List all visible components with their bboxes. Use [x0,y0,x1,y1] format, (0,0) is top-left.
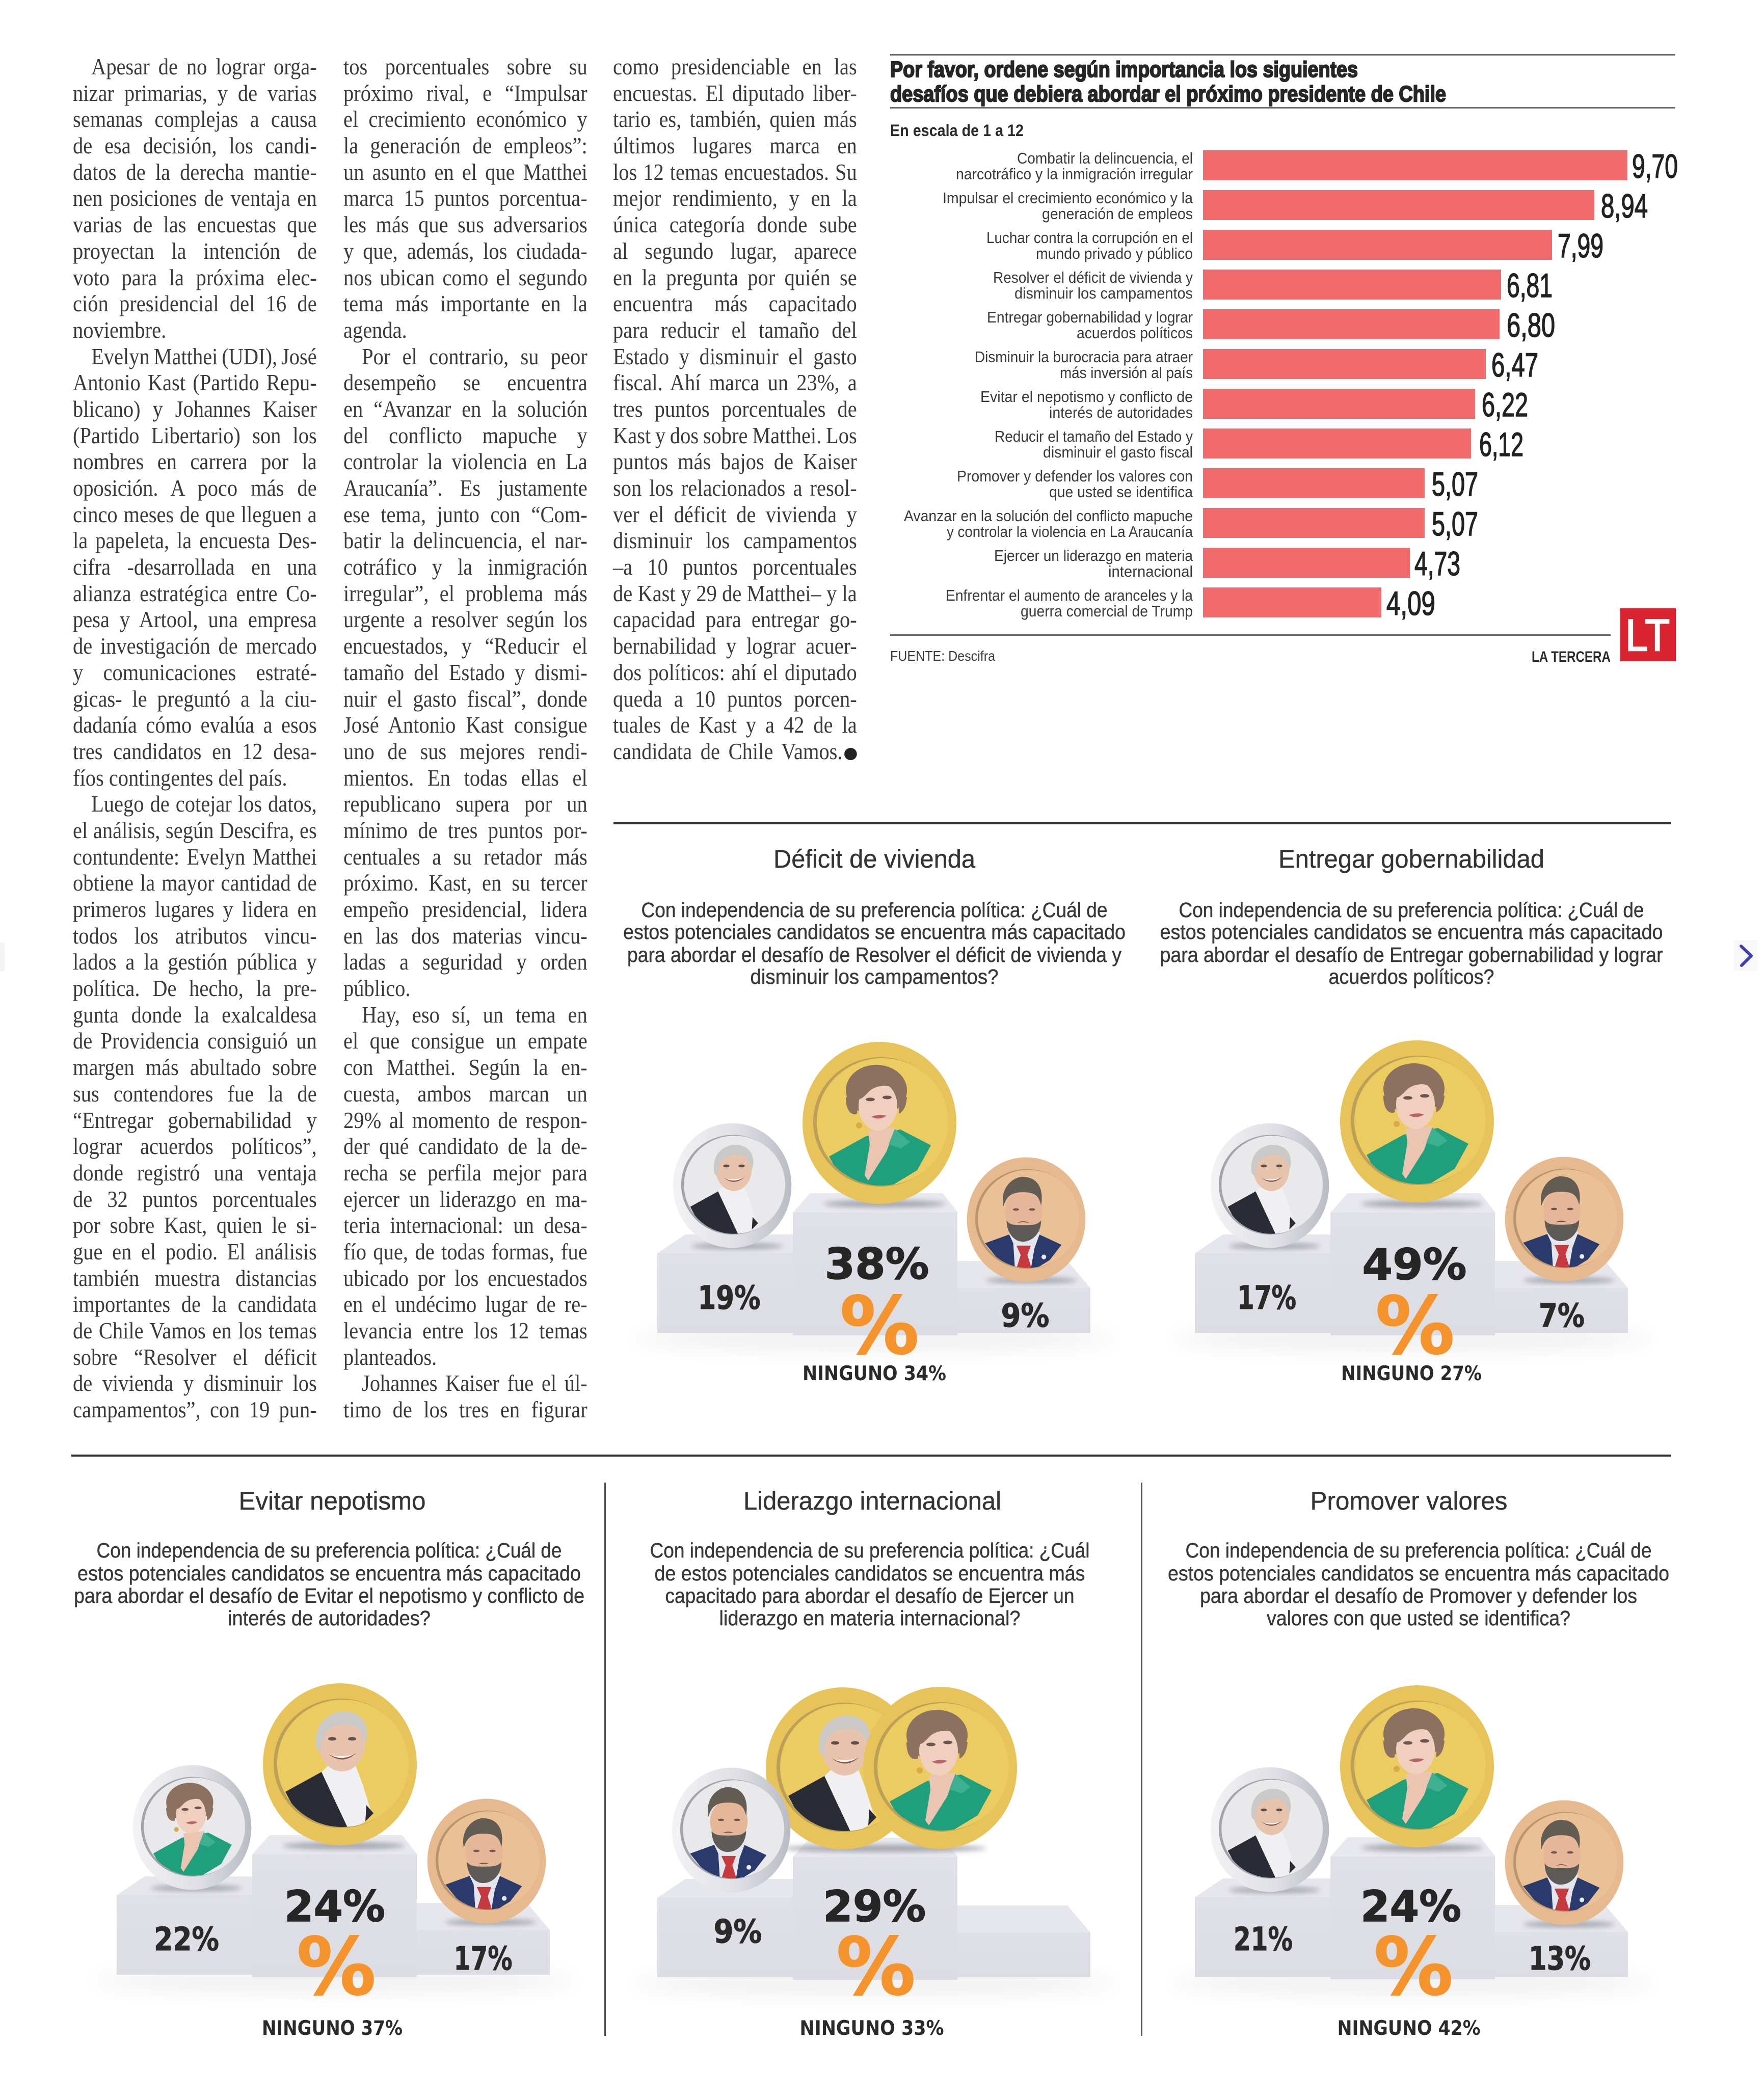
body text column 2: agenda. [343,317,407,343]
body text column 2: 29% al momento de respon- [343,1107,587,1133]
coin: Matthei gold [803,1042,956,1204]
bar values: 5,07 [1432,465,1478,503]
body text column 3: dos políticos: ahí el diputado [613,659,857,685]
bars [1203,150,1627,617]
body text column 1: obtiene la mayor cantidad de [73,870,317,896]
question [1168,1539,1669,1630]
question: estos potenciales candidatos se encuentra más capacitado [1168,1562,1669,1585]
body text column 2: tema más importante en la [343,290,587,316]
second place value: 17% [1237,1279,1296,1316]
bar labels: más inversión al país [1060,364,1193,382]
logo: LT: LT [1625,610,1670,660]
body text column 2: tos porcentuales sobre su [343,53,587,79]
bar labels: Luchar contra la corrupción en el [986,229,1193,247]
bar labels: Impulsar el crecimiento económico y la [943,189,1193,207]
panel title: Liderazgo internacional [743,1487,1001,1515]
body text column 1: Apesar de no lograr orga- [91,53,317,79]
body text column 2: teria internacional: un desa- [343,1212,587,1238]
body text column 3: en la pregunta por quién se [613,264,857,290]
body text column 2 [343,53,587,1422]
first place value: 24% [1360,1881,1461,1931]
body text column 1: por sobre Kast, quien le si- [73,1212,317,1238]
body text column 1: Luego de cotejar los datos, [91,791,317,817]
coin: Matthei gold [1340,1040,1494,1202]
panel title: Evitar nepotismo [238,1487,426,1515]
body text column 2: uno de sus mejores rendi- [343,738,587,764]
question: para abordar el desafío de Promover y defender los [1200,1584,1637,1607]
body text column 2: encuestados, y “Reducir el [343,633,587,659]
body text column 2: controlar la violencia en La [343,448,587,474]
second place value: 22% [154,1921,219,1958]
body text column 3: –a 10 puntos porcentuales [613,554,857,580]
body text column 1: de investigación de mercado [73,633,317,659]
body text column 3: tario es, también, quien más [613,106,857,132]
bar values: 4,73 [1414,545,1460,582]
body text column 2: republicano supera por un [343,791,587,817]
body text column 1: de Chile Vamos en los temas [73,1318,317,1343]
body text column 1: Evelyn Matthei (UDI), José [91,343,317,369]
coin: Matthei gold [863,1687,1017,1849]
body text column 2: en las dos materias vincu- [343,923,587,949]
third place value: 7% [1539,1297,1585,1334]
bar labels: guerra comercial de Trump [1021,602,1193,620]
question: estos potenciales candidatos se encuentra más capacitado [623,920,1126,944]
coin: Kaiser bronze [427,1799,546,1923]
chart: desafíos ranking [890,54,1678,665]
body text column 1: “Entregar gobernabilidad y [73,1107,317,1133]
none value: NINGUNO 34% [803,1362,946,1385]
bar labels: Reducir el tamaño del Estado y [995,427,1193,445]
question: estos potenciales candidatos se encuentra más capacitado [77,1562,581,1585]
body text column 2: desempeño se encuentra [343,369,587,395]
body text column 1: datos de la derecha mantie- [73,159,317,185]
question [74,1539,584,1630]
bar labels: Entregar gobernabilidad y lograr [987,308,1193,326]
body text column 1: voto para la próxima elec- [73,264,317,290]
coin: Kaiser silver [672,1768,790,1892]
bar values: 5,07 [1432,505,1478,543]
body text column 2: der qué candidato de la de- [343,1133,587,1159]
body text column 1: gunta donde la exalcaldesa [73,1002,317,1028]
chart title: desafíos que debiera abordar el próximo presidente de Chile [890,82,1446,106]
bar labels: Enfrentar el aumento de aranceles y la [946,586,1193,604]
coin: Kaiser bronze [967,1158,1085,1282]
panel title: Promover valores [1311,1487,1507,1515]
body text column 1: de esa decisión, los candi- [73,132,317,158]
body text column 2: mínimo de tres puntos por- [343,817,587,843]
none value: NINGUNO 33% [800,2017,944,2040]
body text column 2: ese tema, junto con “Com- [343,501,587,527]
body text column 3: para reducir el tamaño del [613,317,857,343]
body text column 3: de Kast y 29 de Matthei– y la [613,580,857,606]
second place value: 19% [698,1279,760,1316]
body text column 3: Estado y disminuir el gasto [613,343,857,369]
third place value: 17% [453,1940,513,1977]
body text column 3: capacidad para entregar go- [613,606,857,632]
body text column 1: proyectan la intención de [73,238,317,264]
body text column 2: mientos. En todas ellas el [343,765,587,791]
body text column 3: son los relacionados a resol- [613,475,857,501]
body text column 1: política. De hecho, la pre- [73,975,317,1001]
bar labels: Ejercer un liderazgo en materia [994,547,1193,564]
bar labels: mundo privado y público [1036,245,1193,262]
body text column 1: la papeleta, la encuesta Des- [73,527,317,553]
podium [635,1193,1114,1351]
orange percent icon: % [840,1280,919,1372]
body text column 1: noviembre. [73,317,166,343]
body text column 2: ubicado por los encuestados [343,1265,587,1291]
body text column 1: margen más abultado sobre [73,1054,317,1080]
body text column 2: urgente a resolver según los [343,606,587,632]
body text column 1: pesa y Artool, una empresa [73,606,317,632]
question [650,1539,1089,1630]
first place value: 24% [284,1881,385,1931]
body text column 1: gicas- le preguntó a la ciu- [73,686,317,711]
bar labels: Avanzar en la solución del conflicto mapuche [904,507,1193,525]
bar values: 4,09 [1386,584,1435,622]
body text column 3: encuentra más capacitado [613,290,857,316]
body text column 1: nombres en carrera por la [73,448,317,474]
bar labels: acuerdos políticos [1077,324,1193,342]
question: Con independencia de su preferencia política: ¿Cuál de [1185,1539,1652,1562]
panel: evitar nepotismo [74,1487,584,2040]
question: interés de autoridades? [228,1606,431,1630]
body text column 3: fiscal. Ahí marca un 23%, a [613,369,857,395]
bar labels: disminuir los campamentos [1014,284,1193,302]
nav arrow right [1733,940,1757,971]
panel: entregar gobernabilidad [1160,845,1663,1385]
body text column 2: próximo rival, e “Impulsar [343,80,587,106]
coin: Matthei silver [133,1765,251,1890]
body text column 3: al segundo lugar, aparece [613,238,857,264]
body text column 2: un asunto en el que Matthei [343,159,587,185]
bar values: 6,22 [1482,386,1528,423]
body text column 1: fíos contingentes del país. [73,765,287,791]
coin: Matthei gold [1340,1685,1494,1847]
question: de estos potenciales candidatos se encuentra más [654,1562,1085,1585]
panel: liderazgo internacional [635,1487,1114,2040]
body text column 3: ver el déficit de vivienda y [613,501,857,527]
body text column 2: empeño presidencial, lidera [343,896,587,922]
body text column 1: donde registró una ventaja [73,1160,317,1186]
body text column 1: nizar primarias, y de varias [73,80,317,106]
La Tercera credit: LA TERCERA [1532,649,1611,665]
body text column 2: recha se perfila mejor para [343,1160,587,1186]
body text column 1: también muestra distancias [73,1265,317,1291]
coin: Kaiser bronze [1505,1800,1623,1925]
second place value: 21% [1234,1921,1293,1958]
body text column 1: sus contendores fue la de [73,1081,317,1107]
body text column 3: disminuir los campamentos [613,527,857,553]
question: para abordar el desafío de Resolver el déficit de vivienda y [627,943,1121,966]
body text column 2: batir la delincuencia, el nar- [343,527,587,553]
none value: NINGUNO 27% [1341,1362,1482,1385]
body text column 1: sobre “Resolver el déficit [73,1344,317,1370]
body text column 1: cinco meses de que lleguen a [73,501,317,527]
bar labels: internacional [1108,562,1193,580]
body text column 1: de Providencia consiguió un [73,1028,317,1054]
body text column 1: blicano) y Johannes Kaiser [73,396,317,422]
body text column 1: gue en el podio. El análisis [73,1239,317,1265]
coin: Kast gold [263,1683,417,1845]
body text column 2: cuesta, ambos marcan un [343,1081,587,1107]
body text column 2: nos ubican como el segundo [343,264,587,290]
body text column 2: timo de los tres en figurar [343,1396,587,1422]
body text column 1: lados a la gestión pública y [73,949,317,975]
body text column 1: campamentos”, con 19 pun- [73,1396,317,1422]
body text column 1: todos los atributos vincu- [73,923,317,949]
body text column 3: encuestas. El diputado liber- [613,80,857,106]
bar labels: generación de empleos [1042,205,1193,223]
bar values: 7,99 [1558,227,1603,264]
body text column 2: planteados. [343,1344,437,1370]
body text column 2: centuales a su retador más [343,844,587,870]
coin: Kast silver [1211,1767,1329,1892]
body text column 2: ejercer un liderazgo en ma- [343,1186,587,1212]
body text column 2: en “Avanzar en la solución [343,396,587,422]
first place value: 29% [823,1881,926,1931]
body text column 1: Antonio Kast (Partido Repu- [73,369,317,395]
source note: FUENTE: Descifra [890,648,995,664]
panel: promover valores [1168,1487,1669,2040]
first place value: 49% [1362,1240,1466,1289]
body text column 1: semanas complejas a causa [73,106,317,132]
body text column 1: importantes de la candidata [73,1291,317,1317]
podium [1172,1837,1651,1995]
body text column 2: la generación de empleos”: [343,132,587,158]
bar values: 6,81 [1507,266,1553,304]
first place value: 38% [824,1239,929,1289]
question: Con independencia de su preferencia política: ¿Cuál de [1179,898,1644,922]
question: Con independencia de su preferencia política: ¿Cuál [650,1539,1089,1562]
body text column 1: y comunicaciones estraté- [73,659,317,685]
body text column 2: José Antonio Kast consigue [343,712,587,738]
body text column 2: tamaño del Estado y dismi- [343,659,587,685]
body text column 1: de 32 puntos porcentuales [73,1186,317,1212]
body text column 1: contundente: Evelyn Matthei [73,844,317,870]
question: acuerdos políticos? [1329,965,1494,988]
orange percent icon: % [1375,1280,1455,1372]
body text column 1: alianza estratégica entre Co- [73,580,317,606]
body text column 1: lograr acuerdos políticos”, [73,1133,317,1159]
body text column 2: levancia entre los 12 temas [343,1318,587,1343]
question: liderazgo en materia internacional? [719,1606,1020,1630]
bar labels: Promover y defender los valores con [957,467,1193,485]
body text column 2: Araucanía”. Es justamente [343,475,587,501]
bar values [1386,147,1678,622]
second place value: 9% [713,1913,762,1950]
coin: Kaiser bronze [1505,1157,1623,1281]
bar values: 6,80 [1507,306,1555,344]
orange percent icon: % [1374,1921,1453,2013]
question: estos potenciales candidatos se encuentra más capacitado [1160,920,1663,944]
body text column 3 [612,53,857,764]
chart subtitle: En escala de 1 a 12 [890,121,1024,140]
body text column 1 [73,53,317,1422]
body text column 2: público. [343,975,411,1001]
body text column 3: candidata de Chile Vamos. [613,738,843,764]
coin: Kast silver [673,1123,791,1248]
question [1160,898,1663,988]
bar labels: Evitar el nepotismo y conflicto de [980,388,1193,406]
body text column 2: cotráfico y la inmigración [343,554,587,580]
body text column 2: ladas a seguridad y orden [343,949,587,975]
orange percent icon: % [836,1921,916,2013]
bar labels [904,149,1193,620]
body text column 2: nuir el gasto fiscal”, donde [343,686,587,711]
bar labels: que usted se identifica [1049,483,1193,501]
body text column 2: fío que, de todas formas, fue [343,1239,587,1265]
body text column 2: irregular”, el problema más [343,580,587,606]
body text column 2: y que, además, los ciudada- [343,238,587,264]
body text column 1: varias de las encuestas que [73,211,317,237]
body text column 2: el que consigue un empate [343,1028,587,1054]
body text column 3: queda a 10 puntos porcen- [613,686,857,711]
body text column 2: marca 15 puntos porcentua- [343,185,587,211]
question: para abordar el desafío de Evitar el nepotismo y conflicto de [74,1584,584,1607]
bar values: 9,70 [1632,147,1678,185]
body text column 2: les más que sus adversarios [343,211,587,237]
bar values: 6,47 [1491,346,1538,384]
bar labels: Combatir la delincuencia, el [1017,149,1193,167]
bar labels: narcotráfico y la inmigración irregular [956,165,1193,183]
bar labels: y controlar la violencia en La Araucanía [947,523,1193,541]
chart title: Por favor, ordene según importancia los siguientes [890,57,1358,82]
question [623,898,1126,988]
none value: NINGUNO 42% [1337,2017,1481,2040]
body text column 3: puntos más bajos de Kaiser [613,448,857,474]
body text column 3: tuales de Kast y a 42 de la [613,712,857,738]
question: valores con que usted se identifica? [1267,1606,1570,1630]
panel title: Entregar gobernabilidad [1278,845,1544,873]
podium [94,1835,573,1993]
panel title: Déficit de vivienda [773,845,975,873]
third place value: 9% [1001,1297,1050,1334]
none value: NINGUNO 37% [262,2017,403,2040]
question: Con independencia de su preferencia política: ¿Cuál de [97,1539,562,1562]
bar labels: Resolver el déficit de vivienda y [993,268,1193,286]
chart title [890,57,1446,106]
bar values: 6,12 [1479,425,1524,463]
body text column 1: ción presidencial del 16 de [73,290,317,316]
question: disminuir los campamentos? [750,965,999,988]
body text column 1: de vivienda y disminuir los [73,1370,317,1396]
body text column 2: Johannes Kaiser fue el úl- [362,1370,587,1396]
question: para abordar el desafío de Entregar gobernabilidad y lograr [1160,943,1663,966]
podium [635,1838,1114,1996]
body text column 3: los 12 temas encuestados. Su [613,159,857,185]
bar labels: disminuir el gasto fiscal [1043,443,1193,461]
body text column 2: Hay, eso sí, un tema en [362,1002,587,1028]
body text column 3: bernabilidad y lograr acuer- [613,633,857,659]
nav arrow left [0,943,5,971]
body text column 1: dadanía cómo evalúa a esos [73,712,317,738]
orange percent icon: % [297,1921,376,2013]
bar values: 8,94 [1601,187,1648,225]
question: capacitado para abordar el desafío de Ejercer un [665,1584,1074,1607]
bar labels: interés de autoridades [1049,404,1193,421]
body text column 1: oposición. A poco más de [73,475,317,501]
body text column 2: Por el contrario, su peor [362,343,587,369]
panel: déficit de vivienda [623,845,1126,1385]
body text column 3: única categoría donde sube [613,211,857,237]
body text column 1: cifra -desarrollada en una [73,554,317,580]
body text column 2: el crecimiento económico y [343,106,587,132]
body text column 3: últimos lugares marca en [613,132,857,158]
question: Con independencia de su preferencia política: ¿Cuál de [641,898,1108,922]
body text column 3: Kast y dos sobre Matthei. Los [613,422,857,448]
body text column 3: mejor rendimiento, y en la [613,185,857,211]
body text column 1: (Partido Libertario) son los [73,422,317,448]
coin: Kast gold [766,1687,920,1849]
body text column 2: en el undécimo lugar de re- [343,1291,587,1317]
bar labels: Disminuir la burocracia para atraer [975,348,1193,366]
body text column 3: como presidenciable en las [613,53,857,79]
body text column 1: primeros lugares y lidera en [73,896,317,922]
coin: Kast silver [1211,1123,1329,1248]
body text column 3: tres puntos porcentuales de [613,396,857,422]
third place value: 13% [1529,1940,1591,1977]
body text column 1: el análisis, según Descifra, es [73,817,317,843]
body text column 2: con Matthei. Según la en- [343,1054,587,1080]
body text column 1: tres candidatos en 12 desa- [73,738,317,764]
body text column 2: próximo. Kast, en su tercer [343,870,587,896]
body text column 1: nen posiciones de ventaja en [73,185,317,211]
podium [1172,1193,1651,1351]
body text column 2: del conflicto mapuche y [343,422,587,448]
